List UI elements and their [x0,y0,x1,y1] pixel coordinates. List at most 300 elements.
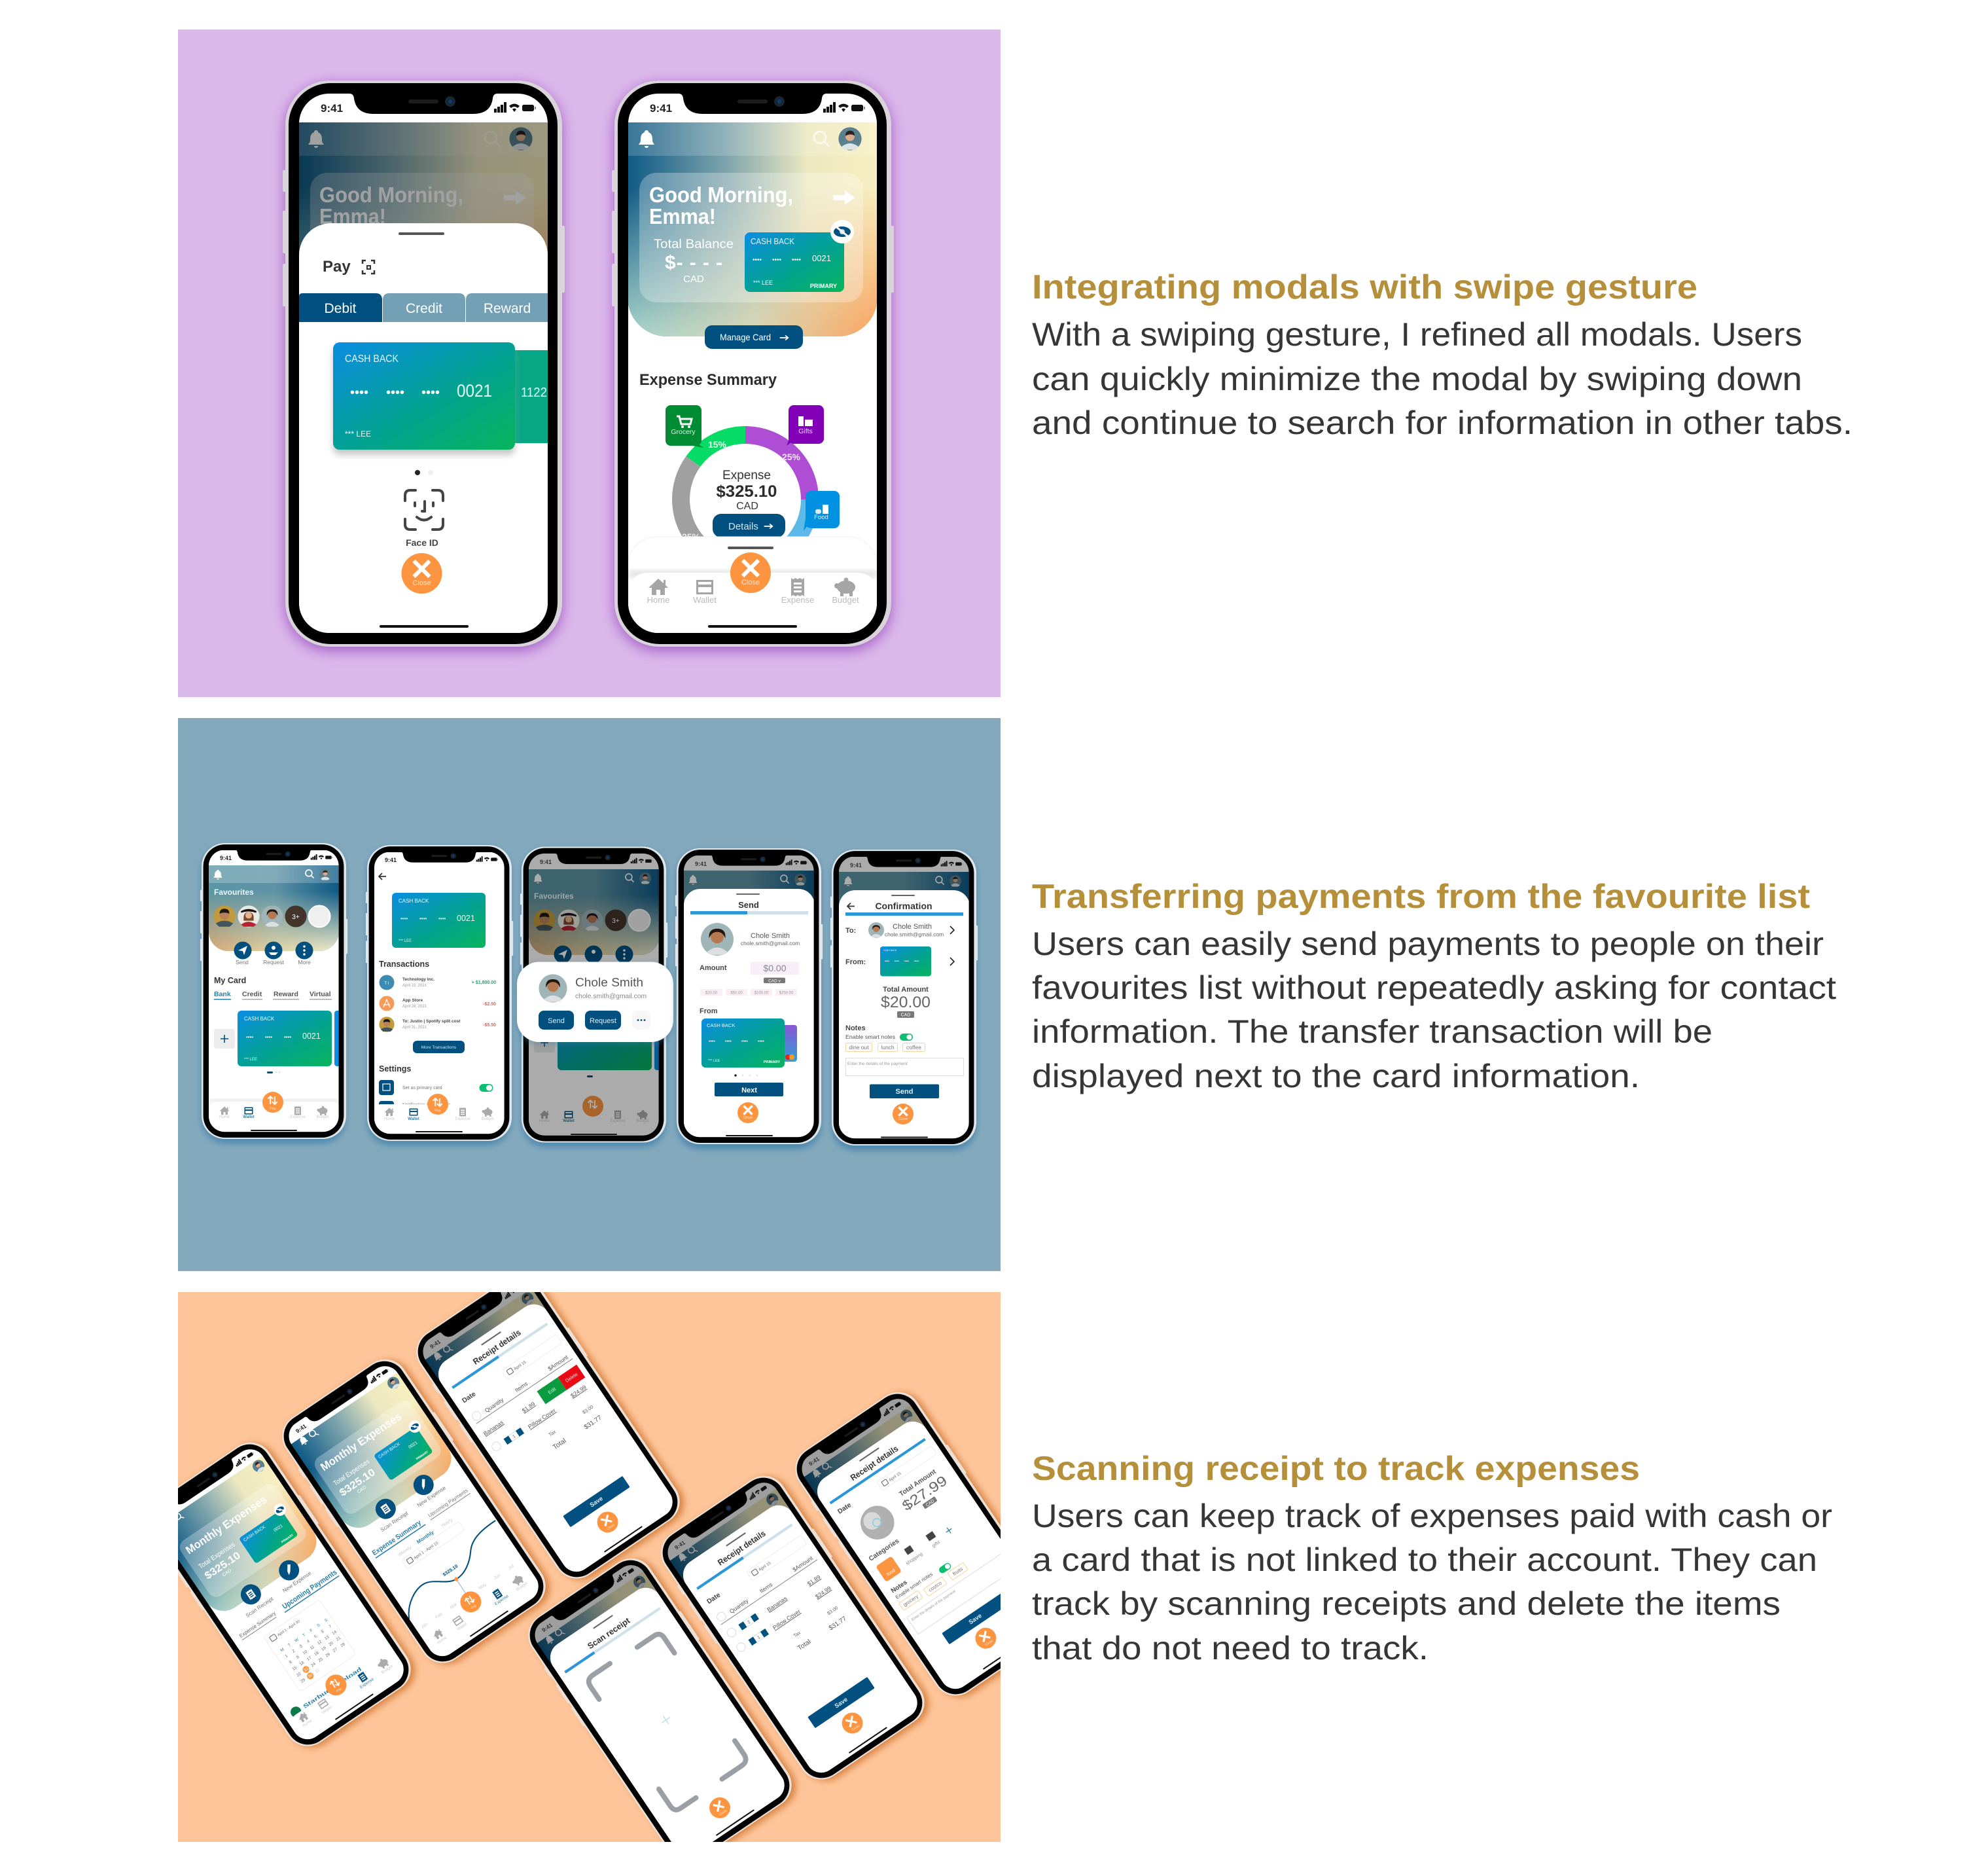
phone: receipt details: $1.89 [806,1574,822,1587]
phone: card transactions: •••• [419,916,427,922]
phone: confirmation: Confirmation [875,901,932,911]
phone: receipt total: costco [927,1580,943,1593]
phone: scan receipt [518,1548,805,1855]
phone: monthly expenses calendar: Starbucks reload [302,1666,363,1710]
modal sheet: •••• [386,386,404,400]
phone: send amount: Chole Smith [751,932,790,940]
navigation bar: Wallet [243,1115,255,1119]
phone: receipt details with swipe actions: 1 [512,1434,517,1439]
calendar: 28 [340,1642,346,1648]
text: receipt scanning: a card that is not linked to their account. They can [1032,1541,1817,1578]
phone: card transactions: -$2.50 [483,1002,496,1007]
chart: expense donut [681,435,810,545]
phone: monthly expenses chart: Upcoming Payments [427,1488,469,1519]
phone: pay modal [283,81,565,651]
phone: favourites wallet: •••• [246,1034,253,1040]
phone: monthly expenses chart: Yearly [440,1517,454,1528]
phone: receipt total: gifts [931,1539,942,1549]
calendar: S [316,1623,321,1629]
phone: monthly expenses calendar: $325.10 [203,1550,243,1582]
phone: monthly expenses chart: Budget [516,1581,529,1592]
phone: card transactions: April 31, 2021 [402,1026,427,1030]
calendar: 6 [321,1629,325,1634]
text: favourite transfers: information. The transfer transaction will be [1032,1013,1713,1050]
phone: confirmation: CAD [901,1013,910,1017]
phone: monthly expenses calendar: Home [302,1718,313,1728]
phone: send amount: From [700,1007,718,1015]
phone: receipt details with swipe actions: April 15 [513,1360,527,1371]
phone: receipt details: Pillow Cover [772,1608,802,1631]
balance card [639,173,863,302]
phone: confirmation: coffee [906,1044,921,1051]
phone: monthly expenses calendar: 9:41 [160,1505,173,1518]
phone: receipt details with swipe actions: Quantity [484,1396,505,1414]
navigation bar: Home [219,1115,230,1119]
bottom sheet and navigation: Close [741,579,760,586]
phone: contact popup: Budget [636,1119,649,1123]
phone: monthly expenses calendar: 0021 [273,1524,284,1533]
phone: favourites wallet: Virtual [310,990,331,998]
phone: receipt details with swipe actions: $31.77 [583,1414,603,1431]
calendar: 31 [314,1668,321,1674]
modal sheet: *** LEE [345,429,371,439]
phone: confirmation: •••• [904,960,909,964]
phone: card transactions: Budget [481,1117,494,1121]
tag: gifts [787,405,824,446]
phone: receipt details with swipe actions: $3.00 [581,1404,594,1415]
phone: receipt details: Receipt details [716,1528,768,1568]
phone: monthly expenses chart: Weekly [397,1544,413,1558]
calendar: 22 [296,1671,302,1678]
phone: receipt details with swipe actions: $Amount [546,1354,570,1372]
phone: receipt details: Items [758,1581,774,1594]
phone: contact popup: Favourites [534,891,574,901]
phone: favourites wallet: 0021 [302,1032,321,1041]
phone: send amount: •••• [741,1039,748,1044]
tag: food: Food [814,514,828,521]
phone: favourites wallet: Reward [274,990,298,998]
phone: monthly expenses chart: Home [436,1635,448,1645]
phone: monthly expenses chart: CASH BACK [378,1441,401,1460]
bottom sheet and navigation: Budget [832,595,859,605]
calendar: 15 [292,1665,298,1672]
manage card button [705,325,803,349]
modal sheet: Face ID [406,537,438,548]
phone: send amount: Amount [700,964,727,972]
phone: send amount: Next [741,1087,757,1094]
phone: receipt details with swipe actions: Edit [547,1386,557,1396]
phone: contact popup: 3+ [612,918,620,925]
calendar: 19 [321,1646,327,1652]
phone: pay modal: 9:41 [321,102,343,115]
popup: Chole Smith: Request [590,1017,616,1025]
calendar: 7 [328,1624,333,1629]
phone: card transactions: 9:41 [385,857,397,863]
tag: grocery [666,405,704,448]
phone: confirmation: Close [898,1117,908,1121]
calendar: 13 [324,1634,330,1641]
close button: Close [412,579,431,587]
screen: home [628,94,878,633]
phone: receipt details with swipe actions: Tax [548,1428,557,1437]
calendar: 16 [299,1660,306,1666]
screen: home: 25% [682,531,701,542]
phone: receipt total: Notes [890,1579,909,1594]
phone: send amount: 9:41 [695,861,707,867]
text: swipe gesture: can quickly minimize the modal by swiping down [1032,361,1802,397]
phone: monthly expenses chart: Total Expenses [332,1458,371,1488]
modal sheet: Reward [484,301,531,316]
phone: card transactions: 0021 [457,914,475,923]
text: receipt scanning: that do not need to track. [1032,1630,1429,1666]
phone: send amount: CAD v [768,979,781,983]
phone: expense summary [612,81,894,651]
phone: expense summary: 9:41 [650,102,672,115]
phone: receipt total [785,1382,1072,1708]
navigation bar: Pay [270,1107,276,1111]
phone: receipt details: $Amount [791,1555,815,1573]
balance card: •••• [792,257,802,264]
popup: Chole Smith: chole.smith@gmail.com [575,992,647,1000]
balance card: 0021 [812,253,831,263]
calendar: 12 [317,1640,323,1646]
phone: card transactions: April 28, 2021 [402,1005,427,1009]
phone: receipt details: 1 [756,1635,762,1640]
chart: monthly curve: Mar [450,1602,459,1610]
phone: receipt total: grocery [902,1593,919,1608]
phone: confirmation: Send [896,1088,913,1096]
phone: scan receipt: 9:41 [541,1621,554,1634]
balance card: Emma! [649,204,716,228]
phone: favourites wallet: More [298,959,311,965]
tag: grocery: Grocery [671,428,696,436]
phone: send amount: •••• [709,1039,715,1044]
phone: confirmation: Notes [845,1024,866,1032]
phone: receipt total: Save [968,1612,983,1625]
phone: monthly expenses chart: New Expense [416,1485,447,1508]
phone: receipt details: April 15 [758,1560,772,1572]
phone: monthly expenses calendar: Monthly Expenses [183,1493,269,1557]
phone: monthly expenses calendar: Scan Receipt [245,1596,275,1619]
calendar [264,1600,356,1692]
phone: contact popup: Home [539,1119,550,1123]
modal sheet: Credit [406,301,442,316]
phone: receipt details with swipe actions: Receipt details [471,1327,523,1367]
phone: card transactions: •••• [438,916,446,922]
bottom sheet and navigation [628,537,878,633]
phone: monthly expenses chart: Wallet [456,1622,468,1632]
phone: confirmation: 9:41 [850,862,862,869]
phone: card transactions: Wallet [408,1117,419,1121]
phone: confirmation: To: [845,927,856,935]
bottom sheet and navigation: Wallet [693,595,717,605]
popup: Chole Smith: Send [548,1017,565,1025]
phone: monthly expenses chart: Pay [470,1604,478,1610]
phone: confirmation [830,850,978,1151]
phone: receipt details: Close [851,1724,861,1732]
chart: monthly curve: Jul [508,1564,515,1571]
panel: swipe gesture modals [178,29,1001,697]
phone: monthly expenses chart: Monthly [416,1529,435,1545]
navigation bar: Expense [290,1115,306,1119]
phone: confirmation: Chole Smith [893,923,932,931]
phone: receipt details with swipe actions: Save [589,1495,604,1508]
chart: monthly curve: Jan [420,1622,429,1630]
screen: home: Expense Summary [639,371,777,389]
text: favourite transfers: displayed next to the card information. [1032,1058,1640,1094]
phone: receipt details: Save [834,1696,849,1709]
screen: home: $325.10 [716,482,777,501]
screen: home: 25% [782,452,801,462]
phone: card transactions: T I [385,982,389,986]
phone: receipt details: Date [706,1591,722,1606]
phone: receipt total: food [885,1567,896,1577]
text: receipt scanning [1032,1450,1832,1666]
screen: pay modal: Good Morning, [319,183,463,207]
chart: monthly curve [391,1521,524,1632]
phone: monthly expenses chart: Scan Receipt [380,1510,410,1533]
calendar: 11 [310,1644,315,1651]
phone: receipt details: Tax [792,1629,802,1638]
screen: pay modal: Emma! [319,204,386,228]
text: favourite transfers [1032,878,1836,1094]
phone: send amount: $250.00 [779,991,794,995]
phone: monthly expenses calendar: Expense [359,1677,375,1689]
phone: receipt details with swipe actions: Items [514,1380,529,1394]
phone: favourites wallet: Credit [242,990,262,998]
calendar: 24 [310,1661,317,1668]
phone: receipt details: Total [796,1638,812,1652]
phone: favourites wallet: Request [263,959,284,965]
phone: confirmation: $20.00 [881,994,931,1011]
phone: card transactions: *** LEE [399,939,412,943]
phone: monthly expenses calendar: Upcoming Payments [281,1568,338,1611]
phone: contact popup: Expense [610,1119,626,1123]
manage card button: Manage Card [720,332,771,342]
phone: card transactions: More Transactions [421,1045,457,1050]
phone: receipt details with swipe actions: Date [461,1390,477,1405]
screen: home: 15% [708,439,727,450]
popup: Chole Smith: Chole Smith [575,976,643,989]
phone: receipt details: $31.77 [828,1615,848,1632]
calendar: T [287,1642,292,1648]
balance card: *** LEE [753,279,773,286]
calendar: 23 [303,1666,310,1673]
phone: monthly expenses calendar: New Expense [281,1570,313,1594]
phone: confirmation: CASH BACK [883,949,897,952]
phone: card transactions: App Store [402,998,423,1003]
calendar: 3 [299,1644,304,1649]
phone: confirmation: Enter the details of the payment [847,1062,908,1066]
phone: favourites wallet: My Card [214,976,246,985]
close button [402,553,442,594]
screen: home: Expense [722,469,771,482]
phone: receipt details with swipe actions: Pillow Cover [527,1407,557,1430]
calendar: 1 [284,1653,289,1659]
calendar: 20 [328,1641,334,1647]
calendar: 9 [296,1655,300,1660]
text: swipe gesture: Integrating modals with swipe gesture [1032,268,1697,306]
phone: card transactions: Technology Inc. [402,977,435,982]
phone: favourites wallet: Favourites [214,888,254,897]
phone: receipt details with swipe actions: Total [552,1437,567,1451]
phone: receipt details: Quantity [728,1597,750,1615]
phone: card transactions: Notification preferences [402,1103,451,1108]
phone: receipt details with swipe actions: 9:41 [429,1338,442,1350]
phone: receipt details: 9:41 [673,1539,686,1551]
calendar: 10 [302,1649,309,1656]
phone: receipt total: CAD [925,1499,935,1508]
phone: monthly expenses chart: $325.10 [338,1467,378,1499]
navigation bar [209,1092,339,1134]
modal sheet: 1122 [521,386,547,400]
text: receipt scanning: Scanning receipt to track expenses [1032,1450,1640,1488]
screen: home: Details [728,521,758,532]
phone: monthly expenses chart [272,1349,559,1676]
phone: send amount: $20.00 [705,991,718,995]
text: receipt scanning: track by scanning receipts and delete the items [1032,1585,1781,1622]
phone: send amount: $50.00 [730,991,743,995]
phone: favourites wallet: 9:41 [220,855,232,861]
popup: Chole Smith [517,962,673,1044]
calendar: 8 [289,1660,293,1665]
phone: card transactions: Settings [379,1064,411,1073]
text: favourite transfers: Users can easily send payments to people on their [1032,926,1824,962]
phone: contact popup [517,847,673,1147]
phone: receipt details with swipe actions: $24.99 [569,1384,588,1399]
phone: send amount: $0.00 [763,963,787,973]
calendar: 18 [313,1651,320,1657]
icon: face id [405,490,443,530]
phone: card transactions: •••• [400,916,408,922]
phone: monthly expenses calendar: CAD [221,1567,232,1577]
calendar: 14 [331,1629,338,1636]
phone: confirmation: chole.smith@gmail.com [885,931,944,937]
phone: receipt total: $27.99 [899,1472,950,1514]
phone: monthly expenses calendar: CASH BACK [243,1524,266,1543]
modal sheet [299,223,550,633]
chart: monthly curve: May [478,1582,488,1591]
scan brackets [586,1630,749,1812]
phone: confirmation: •••• [895,960,899,964]
phone: favourites wallet: •••• [284,1034,291,1040]
phone: card transactions: CASH BACK [399,898,429,904]
phone: receipt total: fruits [951,1566,964,1577]
phone: receipt total: Receipt details [848,1443,900,1483]
phone: contact popup: Wallet [563,1119,575,1123]
panel: receipt scanning [137,1265,1072,1855]
calendar: M [279,1648,285,1653]
modal sheet: •••• [421,386,440,400]
phone: monthly expenses calendar [137,1432,424,1759]
phone: card transactions [366,845,513,1145]
phone: confirmation: From: [845,958,866,966]
phone: favourites wallet: Bank [214,990,231,998]
phone: card transactions: Transactions [379,960,429,969]
calendar: 25 [317,1657,324,1663]
text: swipe gesture: With a swiping gesture, I refined all modals. Users [1032,316,1802,353]
phone: receipt total: Enter the details of the payment [911,1589,957,1622]
phone: receipt total: shopping [904,1551,924,1566]
balance card: CASH BACK [751,236,794,246]
phone: monthly expenses calendar: Pay [336,1687,343,1693]
phone: card transactions: April 15, 2021 [402,984,427,988]
text: favourite transfers: Transferring payments from the favourite list [1032,878,1810,916]
phone: receipt details: $24.99 [814,1585,832,1600]
phone: receipt total: Total Amount [898,1468,938,1498]
calendar: F [309,1628,314,1633]
phone: send amount: •••• [758,1039,764,1044]
phone: monthly expenses chart: PRIMARY [416,1450,429,1460]
calendar: 17 [306,1655,313,1662]
chart: monthly curve: Jun [493,1573,502,1581]
chart: monthly curve: $325.10 [442,1563,459,1577]
phone: confirmation: lunch [881,1044,895,1051]
phone: receipt total: Date [836,1502,853,1516]
phone: send amount [675,848,823,1149]
phone: scan receipt: Close [719,1809,728,1817]
phone: receipt details with swipe actions: $1.89 [521,1401,537,1414]
phone: confirmation: Enable smart notes [845,1034,895,1040]
phone: receipt details: Bananas [766,1594,789,1613]
phone: card transactions: -$5.50 [483,1023,496,1028]
calendar: April 1 - April 30 [277,1619,301,1638]
chart: monthly curve: Feb [435,1612,444,1620]
phone: card transactions: Home [384,1117,395,1121]
calendar: 26 [325,1651,331,1658]
phone: card transactions: Pay [435,1109,441,1113]
phone: receipt details [651,1466,938,1792]
calendar: 5 [313,1634,318,1639]
phone: receipt details with swipe actions [406,1265,693,1591]
phone: confirmation: Total Amount [883,986,929,994]
phone: receipt details: $3.00 [826,1605,839,1616]
phone: receipt total: Categories [868,1538,901,1563]
calendar: 30 [307,1672,313,1679]
text: favourite transfers: favourites list without repeatedly asking for contact [1032,969,1836,1006]
phone: receipt total: April 15 [888,1471,902,1483]
tag: gifts: Gifts [798,427,813,435]
balance card: CAD [683,274,704,285]
phone: send amount: •••• [725,1039,732,1044]
text: receipt scanning: Users can keep track of expenses paid with cash or [1032,1498,1832,1534]
phone: favourites wallet: *** LEE [244,1058,257,1062]
balance card: $- - - - [665,252,722,274]
phone: card transactions: Set as primary card [402,1086,442,1090]
balance card: PRIMARY [810,283,837,289]
phone: confirmation: •••• [885,960,889,964]
balance card: Good Morning, [649,183,793,207]
phone: card transactions: + $1,800.00 [472,981,496,985]
phone: send amount: Send [738,900,759,910]
phone: favourites wallet [200,843,347,1144]
phone: monthly expenses calendar: Wallet [321,1705,333,1715]
phone: receipt total: Close [984,1639,994,1648]
phone: card transactions: Expense [455,1117,470,1121]
phone: monthly expenses chart: Expense Summary [371,1519,423,1557]
calendar: 27 [332,1647,339,1653]
phone: receipt details with swipe actions: Delete [564,1371,578,1384]
modal sheet: 0021 [457,381,492,401]
phone: monthly expenses calendar: Budget [381,1664,394,1675]
header gradient [628,122,878,336]
phone: monthly expenses calendar: Expense Summary [238,1610,277,1639]
phone: receipt total: Enable smart notes [895,1571,934,1600]
phone: scan receipt: Scan receipt [586,1615,632,1651]
phone: send amount: *** LEE [708,1059,720,1063]
bottom sheet and navigation: Expense [781,595,814,605]
modal sheet: •••• [350,386,368,400]
